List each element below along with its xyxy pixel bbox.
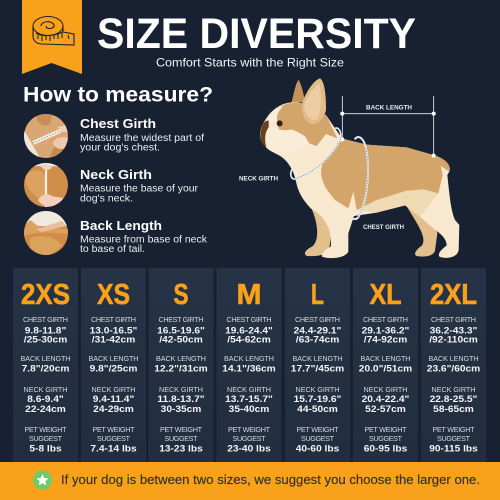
text: back length: Back Length <box>80 219 162 233</box>
chest girth <box>225 315 273 345</box>
chest girth: 16.5-19.6" <box>157 326 205 336</box>
heading: how to measure: How to measure? <box>23 84 213 106</box>
pet weight <box>429 425 478 454</box>
chest chain <box>352 137 368 219</box>
chest girth: /25-30cm <box>24 335 67 345</box>
chest girth <box>90 315 138 345</box>
back length: BACK LENGTH <box>156 354 206 363</box>
neck girth: NECK GIRTH <box>24 385 68 394</box>
back length <box>154 354 208 374</box>
muzzle nose <box>260 121 269 148</box>
chest girth: 36.2-43.3" <box>430 326 478 336</box>
chest girth: /42-50cm <box>159 335 203 345</box>
text: neck girth: Measure the base of your <box>80 184 199 194</box>
back length <box>427 354 480 374</box>
pet weight <box>90 425 137 454</box>
pet weight: 40-60 lbs <box>296 444 340 454</box>
neck girth <box>157 385 205 415</box>
pet weight: 90-115 lbs <box>429 444 478 454</box>
pet weight: 13-23 lbs <box>159 444 203 454</box>
chest girth: /74-92cm <box>364 335 407 345</box>
neck girth: 9.4-11.4" <box>93 394 135 405</box>
size column: L <box>285 268 350 462</box>
back length: 17.7"/45cm <box>291 364 344 374</box>
size column: 2XS <box>13 268 78 462</box>
neck girth: 11.8-13.7" <box>157 394 205 405</box>
size column: XS <box>81 268 146 462</box>
back length <box>20 354 70 374</box>
icon: green star badge <box>33 470 52 490</box>
chest girth: 19.6-24.4" <box>225 326 273 336</box>
near ear <box>302 78 326 124</box>
back length <box>222 354 276 374</box>
head tan patch <box>277 103 337 146</box>
forehead blaze <box>267 106 283 124</box>
pet weight: PET WEIGHT <box>296 425 339 434</box>
back length: 7.8"/20cm <box>22 364 70 374</box>
back length: BACK LENGTH <box>224 354 274 363</box>
text: chest girth: Measure the widest part of <box>80 133 204 144</box>
chest girth: /31-42cm <box>92 335 135 345</box>
line end dots <box>340 112 436 158</box>
pet weight: 7.4-14 lbs <box>90 444 137 454</box>
subtitle: Comfort Starts with the Right Size <box>156 56 344 70</box>
label: neck girth: NECK GIRTH <box>239 176 278 182</box>
pet weight: SUGGEST <box>437 434 471 443</box>
text: chest girth: Chest Girth <box>80 117 156 131</box>
chest girth <box>294 315 342 345</box>
dog illustration with measurement guides <box>260 78 459 258</box>
back length <box>359 354 412 374</box>
pet weight: SUGGEST <box>97 434 131 443</box>
photo: neck girth <box>24 163 68 207</box>
text: neck girth: dog's neck. <box>80 194 133 204</box>
text: neck girth: Neck Girth <box>80 168 152 182</box>
cheek cream <box>261 125 308 154</box>
back length: 23.6"/60cm <box>427 364 480 374</box>
back length: 9.8"/25cm <box>90 364 138 374</box>
body silhouette in cream <box>260 102 459 258</box>
pet weight: 5-8 lbs <box>29 444 62 454</box>
neck girth: NECK GIRTH <box>296 385 340 394</box>
banner note: If your dog is between two sizes, we suggest you choose the larger one. <box>61 472 480 487</box>
pet weight: SUGGEST <box>29 434 63 443</box>
pet weight: PET WEIGHT <box>228 425 271 434</box>
back length <box>88 354 138 374</box>
neck girth <box>362 385 410 415</box>
chest girth: /54-62cm <box>227 335 271 345</box>
neck girth <box>92 385 136 415</box>
pet weight: PET WEIGHT <box>364 425 407 434</box>
size column: 2XL <box>421 268 486 462</box>
neck girth: 24-29cm <box>93 404 134 415</box>
chest girth: /92-110cm <box>429 335 478 345</box>
back length: BACK LENGTH <box>88 354 138 363</box>
back length: BACK LENGTH <box>292 354 342 363</box>
size column: M <box>216 268 282 462</box>
far ear <box>291 80 305 103</box>
neck girth: 22.8-25.5" <box>430 394 478 405</box>
icon: tape measure <box>33 16 74 45</box>
chest girth: CHEST GIRTH <box>431 315 476 324</box>
chest girth: CHEST GIRTH <box>363 315 408 324</box>
neck girth <box>294 385 342 415</box>
back length: 14.1"/36cm <box>222 364 276 374</box>
pet weight <box>159 425 203 454</box>
photo: chest girth <box>24 114 68 158</box>
neck girth <box>225 385 273 415</box>
neck girth: 35-40cm <box>229 404 270 415</box>
text: chest girth: your dog's chest. <box>80 142 160 154</box>
chest girth <box>157 315 205 345</box>
pet weight <box>227 425 271 454</box>
chest girth <box>23 315 68 345</box>
size name: XL <box>370 279 402 311</box>
chest girth: CHEST GIRTH <box>91 315 136 324</box>
size name: M <box>236 279 262 311</box>
text: neck girth <box>80 168 199 204</box>
size name: 2XL <box>430 279 477 311</box>
ribbon badge with tape measure icon <box>22 0 82 74</box>
pet weight: SUGGEST <box>369 434 403 443</box>
measurement lines <box>340 96 436 156</box>
chest girth: CHEST GIRTH <box>23 315 68 324</box>
chest girth: 13.0-16.5" <box>90 326 138 336</box>
pet weight: 23-40 lbs <box>227 444 271 454</box>
size name: L <box>311 279 324 311</box>
chest girth: CHEST GIRTH <box>226 315 272 324</box>
back length: BACK LENGTH <box>360 354 410 363</box>
eye <box>277 120 283 126</box>
text: back length: to base of tail. <box>80 244 145 255</box>
back length: BACK LENGTH <box>428 354 478 363</box>
bottom banner <box>0 462 500 500</box>
chest girth: /63-74cm <box>296 335 339 345</box>
chest girth <box>429 315 478 345</box>
neck girth: 44-50cm <box>297 404 338 415</box>
chest girth <box>362 315 410 345</box>
pet weight: PET WEIGHT <box>160 425 203 434</box>
lighter belly band <box>357 189 438 217</box>
pet weight <box>24 425 67 454</box>
photo: back length <box>24 211 68 255</box>
text: chest girth <box>80 117 204 154</box>
neck girth: NECK GIRTH <box>92 385 136 394</box>
neck girth <box>24 385 68 415</box>
neck girth: 15.7-19.6" <box>294 394 342 405</box>
neck girth: 13.7-15.7" <box>225 394 273 405</box>
chest girth: CHEST GIRTH <box>158 315 204 324</box>
label: chest girth: CHEST GIRTH <box>363 224 404 231</box>
neck girth: NECK GIRTH <box>364 385 408 394</box>
body tan coat <box>321 139 450 210</box>
back length: 12.2"/31cm <box>154 364 208 374</box>
pet weight: SUGGEST <box>164 434 198 443</box>
back length: 20.0"/51cm <box>359 364 412 374</box>
pet weight: PET WEIGHT <box>24 425 67 434</box>
neck girth <box>430 385 478 415</box>
pet weight: SUGGEST <box>232 434 266 443</box>
title: SIZE DIVERSITY <box>97 10 416 58</box>
chest girth: 24.4-29.1" <box>294 326 342 336</box>
pet weight: SUGGEST <box>301 434 335 443</box>
neck girth: 30-35cm <box>161 404 202 415</box>
size name: 2XS <box>21 279 70 311</box>
pet weight: 60-95 lbs <box>364 444 408 454</box>
size column: XL <box>353 268 418 462</box>
pet weight: PET WEIGHT <box>432 425 475 434</box>
neck girth: NECK GIRTH <box>159 385 203 394</box>
neck girth: 22-24cm <box>25 404 66 415</box>
neck chain <box>291 128 341 179</box>
size name: XS <box>97 279 130 311</box>
label: back length: BACK LENGTH <box>366 104 412 112</box>
back length: BACK LENGTH <box>20 354 70 363</box>
size name: S <box>174 279 188 311</box>
far legs <box>305 203 437 257</box>
neck girth: 20.4-22.4" <box>362 394 410 405</box>
chest girth: 29.1-36.2" <box>362 326 410 336</box>
text: back length: Measure from base of neck <box>80 234 208 246</box>
neck girth: 58-65cm <box>433 404 474 415</box>
neck girth: 52-57cm <box>365 404 406 415</box>
size column: S <box>148 268 214 462</box>
pet weight <box>364 425 408 454</box>
pet weight <box>296 425 340 454</box>
chest girth: 9.8-11.8" <box>25 326 67 336</box>
neck girth: NECK GIRTH <box>227 385 271 394</box>
neck girth: NECK GIRTH <box>432 385 476 394</box>
chest girth: CHEST GIRTH <box>295 315 340 324</box>
neck girth: 8.6-9.4" <box>27 394 64 405</box>
pet weight: PET WEIGHT <box>92 425 135 434</box>
back length <box>291 354 344 374</box>
text: back length <box>80 219 208 255</box>
